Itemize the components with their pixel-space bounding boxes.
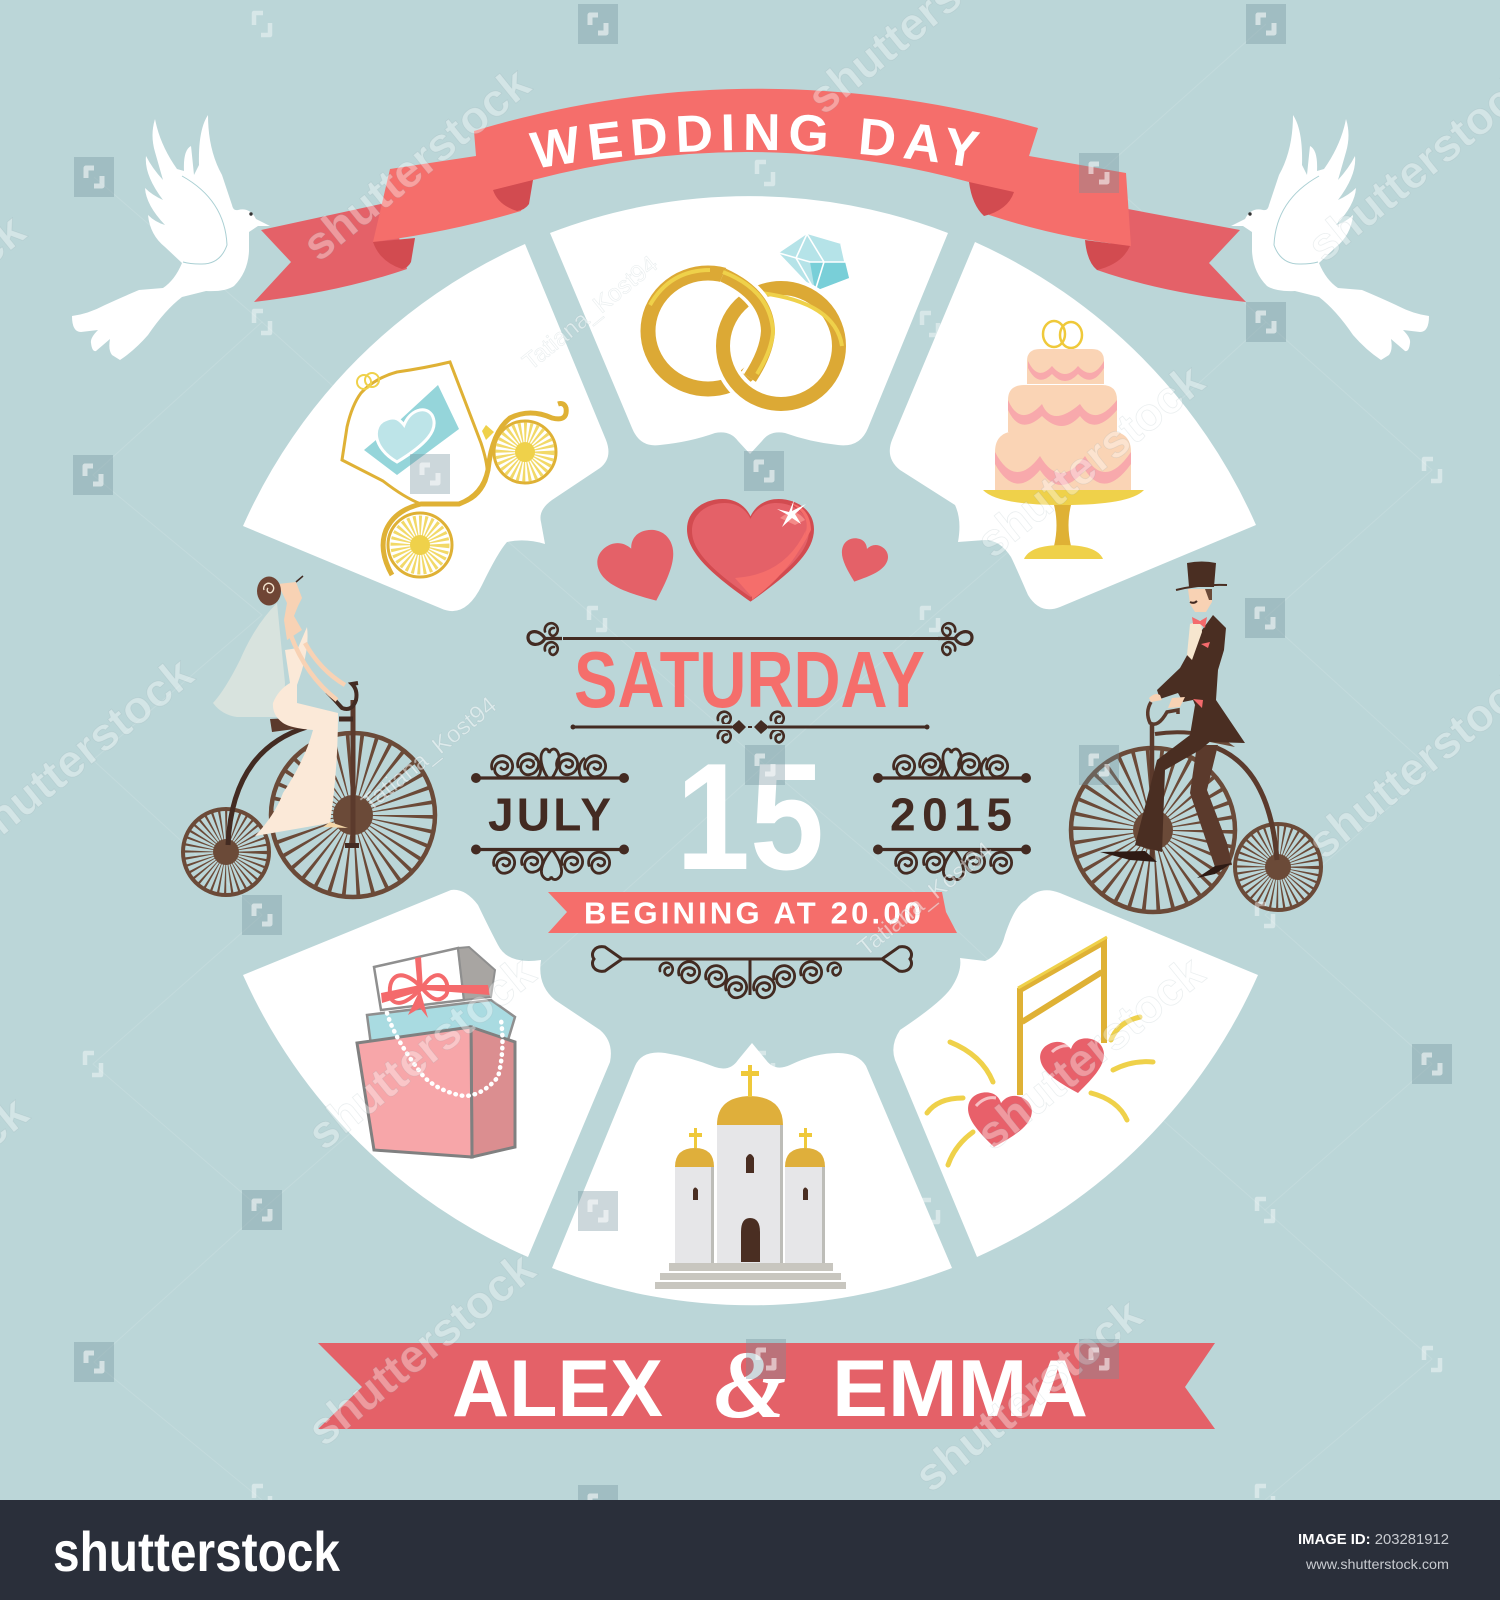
watermark: shutterstock repeats: shutterstock bbox=[297, 1241, 545, 1456]
icon: interlocked rings bbox=[648, 270, 842, 404]
ribbon fold: inner left bbox=[493, 180, 533, 211]
front leg bbox=[1135, 705, 1218, 852]
ribbon tail: right bbox=[1097, 209, 1246, 302]
ribbon main band bbox=[373, 89, 1131, 246]
figure: groom on penny-farthing bbox=[1071, 562, 1321, 912]
ornament: top flourish line bbox=[528, 623, 972, 655]
icon: right small heart bbox=[832, 535, 892, 589]
text: ampersand: & bbox=[714, 1331, 786, 1438]
ribbon fold: outer right bbox=[1085, 240, 1130, 270]
icon: carriage rear wheel bbox=[388, 513, 452, 577]
ribbon fold: inner right bbox=[969, 182, 1014, 216]
icon: church bbox=[655, 1065, 846, 1289]
icon: carriage front wheel bbox=[494, 421, 556, 483]
watermark: shutterstock repeats: shutterstock bbox=[292, 56, 540, 271]
footer logo: shutterstock bbox=[53, 1520, 341, 1583]
watermark: shutterstock repeats: shutterstock bbox=[297, 945, 545, 1160]
ribbon tail: left bbox=[254, 202, 407, 302]
date block: july bbox=[471, 749, 629, 880]
icon: right dove bbox=[1231, 115, 1429, 360]
watermark: shutterstock repeats: shutterstock bbox=[966, 353, 1214, 568]
heading: wedding day: WEDDING DAY bbox=[528, 114, 980, 168]
watermark: contributor name: Tatiana_Kost94 bbox=[517, 251, 663, 376]
panel: music note bbox=[893, 890, 1258, 1257]
text: july: JULY bbox=[488, 788, 611, 840]
bow tie bbox=[1192, 617, 1207, 628]
date block: 15: 15 bbox=[676, 732, 824, 902]
head and arms bbox=[257, 576, 345, 700]
icon: large heart bbox=[687, 499, 814, 602]
big wheel bbox=[1071, 748, 1235, 912]
date block: 2015 bbox=[873, 749, 1031, 880]
panel: wedding carriage bbox=[243, 244, 608, 611]
big wheel bbox=[271, 733, 435, 897]
dress bbox=[255, 627, 338, 836]
ribbon fold: outer left bbox=[373, 238, 415, 269]
coat bbox=[1157, 615, 1245, 743]
head and hat bbox=[1176, 562, 1227, 612]
ribbon: begining time bbox=[548, 892, 957, 933]
figure: bride on penny-farthing bbox=[183, 576, 435, 897]
footer bar bbox=[0, 1500, 1500, 1600]
ornament: center flourish line bbox=[570, 712, 930, 742]
panel: church bbox=[552, 1043, 952, 1305]
small wheel bbox=[1235, 824, 1321, 910]
watermark: contributor name bbox=[356, 251, 998, 962]
shirt bbox=[1187, 620, 1202, 660]
ornament: bottom flourish bbox=[592, 947, 912, 998]
icon: carriage bbox=[342, 362, 566, 577]
watermark: contributor name: Tatiana_Kost94 bbox=[356, 692, 502, 817]
footer image id: IMAGE ID: 203281912 bbox=[1298, 1531, 1449, 1548]
text: begining at 20.00: BEGINING AT 20.00 bbox=[584, 896, 921, 930]
icon: hearts cluster bbox=[591, 499, 892, 615]
text: 2015: 2015 bbox=[890, 788, 1012, 840]
heading: saturday: SATURDAY bbox=[574, 635, 925, 724]
small wheel bbox=[183, 809, 269, 895]
text: alex: ALEX bbox=[452, 1344, 663, 1434]
icon: cake bbox=[983, 321, 1144, 559]
panel: wedding rings bbox=[550, 196, 948, 454]
watermark: contributor name: Tatiana_Kost94 bbox=[852, 837, 998, 962]
icon: left dove bbox=[72, 115, 270, 360]
watermark: shutterstock repeats: shutterstock bbox=[904, 1287, 1152, 1502]
icon: gift boxes bbox=[357, 947, 515, 1157]
ribbon: names bbox=[318, 1331, 1215, 1438]
hands bbox=[1149, 694, 1185, 708]
panel: wedding cake bbox=[890, 242, 1256, 609]
icon: musical note with hearts bbox=[927, 937, 1153, 1165]
veil bbox=[213, 603, 285, 717]
panel: gifts bbox=[243, 890, 611, 1257]
ribbon: wedding day banner bbox=[254, 88, 1246, 302]
back leg bbox=[1190, 745, 1232, 867]
watermark: shutterstock repeats: shutterstock bbox=[966, 945, 1214, 1160]
footer url: www.shutterstock.com bbox=[1305, 1556, 1449, 1572]
icon: left small heart bbox=[591, 523, 692, 615]
icon: diamond bbox=[779, 234, 849, 291]
text: emma: EMMA bbox=[832, 1344, 1088, 1434]
